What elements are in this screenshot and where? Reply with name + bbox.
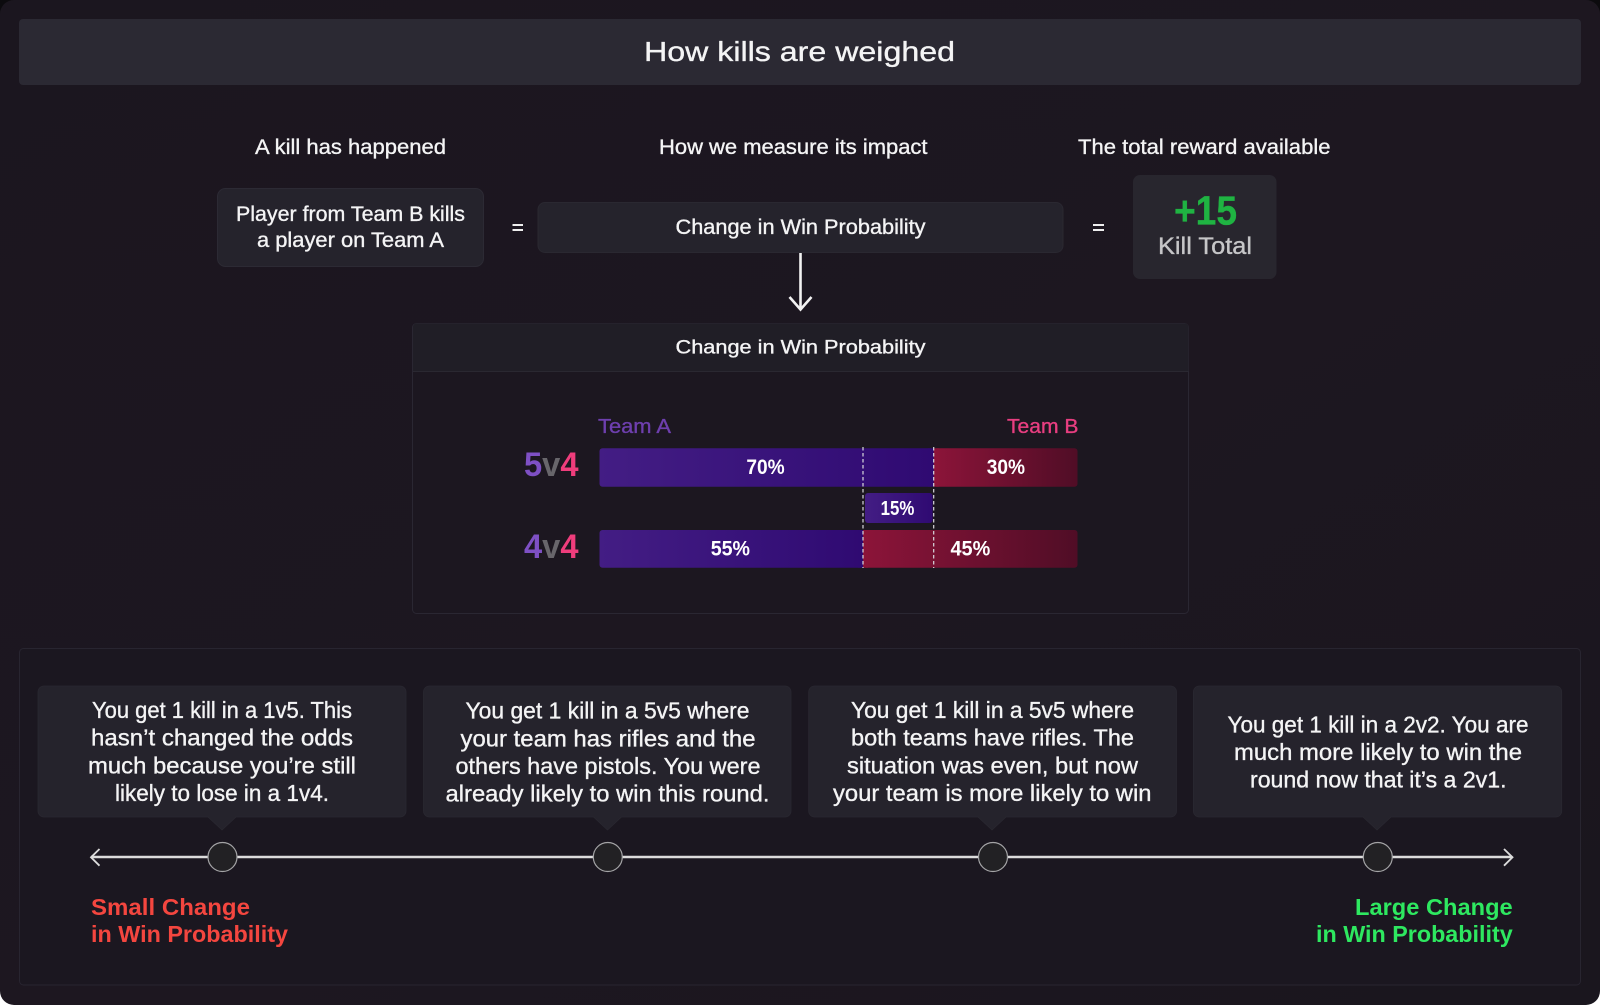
card 3: You get 1 kill in a 5v5 where [851,697,1134,723]
arrow: down [790,253,812,310]
timeline markers [208,842,1392,872]
heading: the total reward available: The total reward available [1078,136,1330,159]
title bar [19,19,1581,85]
box: kill event: Player from Team B kills [236,203,465,226]
panel: examples timeline [20,648,1580,985]
card 1: hasn’t changed the odds [91,725,353,751]
panel: change in win probability chart [412,324,1188,614]
card 3: both teams have rifles. The [851,725,1134,751]
card 3 [809,686,1176,830]
card 2 [424,686,791,830]
card 2: others have pistols. You were [456,753,760,779]
bar: 5v4: 30% [987,456,1025,479]
card 4: You get 1 kill in a 2v2. You are [1228,712,1528,738]
card 4: much more likely to win the [1234,739,1522,765]
box: kill total: +15 [1174,188,1237,234]
bar: 15% difference [865,493,933,523]
box: kill total [1133,175,1276,279]
timeline arrow [91,849,1512,866]
bar: 4v4: 55% [711,538,750,560]
box: change in win probability [538,202,1063,252]
equals sign [1093,224,1104,231]
bar: 5v4 [600,448,1078,487]
card 1: You get 1 kill in a 1v5. This [92,697,352,723]
title: How kills are weighed [644,36,955,67]
bar: 5v4: 70% [746,456,785,479]
equals sign [512,224,523,231]
heading: a kill has happened: A kill has happened [255,136,446,159]
label: large change: Large Change [1355,894,1513,920]
label: large change [1316,894,1513,947]
label: 5v4: 5v4 [524,446,579,484]
label: large change: in Win Probability [1316,921,1513,947]
box: kill total: Kill Total [1158,233,1252,260]
legend: team A: Team A [598,415,671,438]
card 3: your team is more likely to win [833,780,1152,806]
card 2: your team has rifles and the [460,726,756,752]
panel heading: Change in Win Probability [676,338,926,358]
bar: 4v4: 45% [950,538,991,560]
card 3: situation was even, but now [847,752,1139,778]
label: small change [91,894,288,947]
box: change in win probability: Change in Win Probability [676,216,926,239]
label: small change: in Win Probability [91,921,288,947]
card 1: likely to lose in a 1v4. [115,780,329,806]
card 4: round now that it’s a 2v1. [1250,766,1506,792]
card 2: You get 1 kill in a 5v5 where [466,698,750,724]
box: kill event: a player on Team A [257,229,444,252]
legend: team B: Team B [1007,415,1078,438]
label: small change: Small Change [91,894,250,920]
card 1 [38,686,406,830]
card 2: already likely to win this round. [446,780,770,806]
card 1: much because you’re still [88,752,356,778]
card 4 [1193,686,1562,830]
bar: 15% difference: 15% [881,498,914,520]
heading: how we measure its impact: How we measure its impact [659,136,928,159]
box: kill event [218,188,484,266]
bar: 4v4 [600,530,1078,568]
label: 4v4: 4v4 [524,528,579,566]
dashed guide lines [863,447,934,568]
